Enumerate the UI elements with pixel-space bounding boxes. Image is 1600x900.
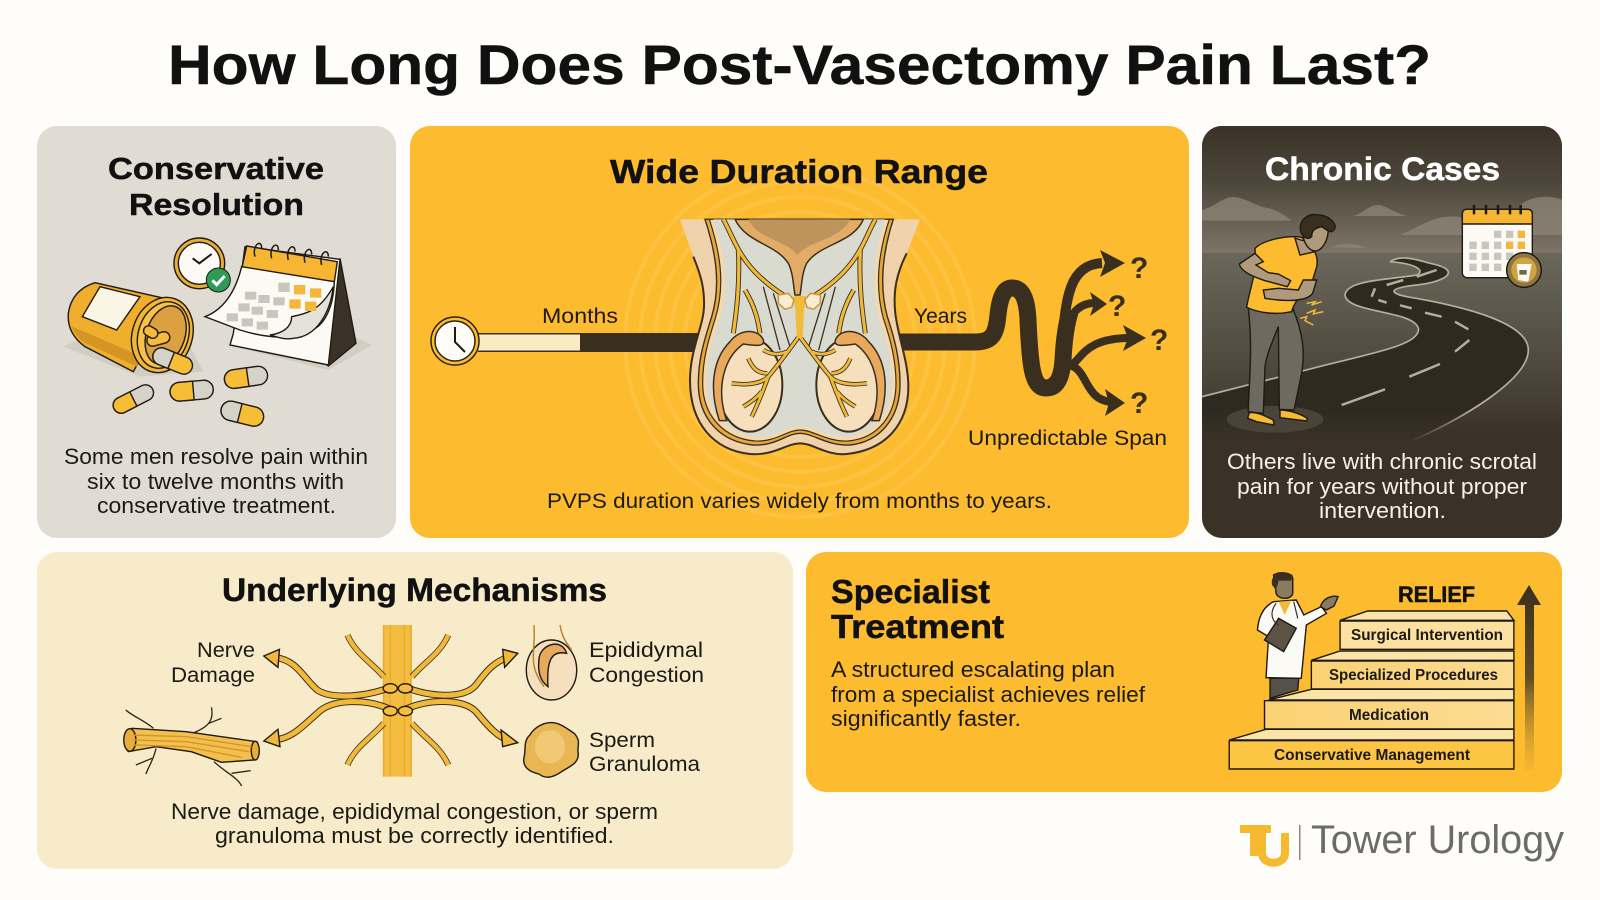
text: mechanisms body: granuloma must be correctly identified. xyxy=(215,823,614,848)
illustration: scrotal anatomy cross-section xyxy=(680,219,920,454)
anatomy: left testis and nerves xyxy=(713,219,800,432)
label: months: Months xyxy=(542,305,618,328)
timeline: years path splitting into unknown outcomes: ? xyxy=(1108,290,1126,323)
text: specialist body: from a specialist achieves relief xyxy=(831,682,1146,707)
panel: specialist treatment xyxy=(806,552,1562,792)
labels: mechanism names: Epididymal xyxy=(589,639,703,662)
icon: damaged nerve fibre xyxy=(124,707,259,786)
timeline: months bar with clock xyxy=(431,305,708,365)
icon: man holding side xyxy=(1239,215,1335,425)
text: specialist body xyxy=(831,657,1146,731)
timeline: years path splitting into unknown outcomes: ? xyxy=(1150,324,1168,357)
icon: capsules xyxy=(110,345,269,428)
heading: specialist treatment: Treatment xyxy=(831,608,1004,645)
label: years: Years xyxy=(914,305,967,328)
staircase of treatment steps xyxy=(1229,611,1514,769)
illustration: pill bottle, clock and calendar xyxy=(63,238,372,428)
labels: mechanism names: Granuloma xyxy=(589,753,700,776)
icon: epididymis xyxy=(526,625,577,700)
text: conservative body: conservative treatment. xyxy=(97,493,336,518)
heading: conservative resolution: Resolution xyxy=(129,187,304,222)
logo wordmark: Tower Urology xyxy=(1311,818,1564,862)
labels: mechanism names: Damage xyxy=(171,664,255,687)
text: specialist body: significantly faster. xyxy=(831,706,1021,731)
heading: wide duration range: Wide Duration Range xyxy=(610,153,988,190)
panel: underlying mechanisms xyxy=(37,552,793,869)
timeline: years path splitting into unknown outcomes: ? xyxy=(1130,387,1148,420)
text: mechanisms body xyxy=(171,799,658,848)
text: duration body: PVPS duration varies widely from months to years. xyxy=(547,490,1052,513)
icon: clock with green check xyxy=(174,238,230,292)
label: relief: RELIEF xyxy=(1398,582,1475,607)
icon: spilled pill bottle xyxy=(68,283,203,381)
icon: calendar with pain badge xyxy=(1462,205,1541,287)
heading: underlying mechanisms: Underlying Mechanisms xyxy=(222,572,607,608)
timeline: years path splitting into unknown outcomes: ? xyxy=(1130,252,1148,285)
text: chronic body: pain for years without proper xyxy=(1237,474,1527,499)
arrow: rising relief xyxy=(1517,585,1541,770)
text: conservative body: Some men resolve pain within xyxy=(64,444,368,469)
labels: mechanism names: Nerve xyxy=(197,639,255,662)
panel: conservative resolution xyxy=(37,126,396,538)
heading: specialist treatment xyxy=(831,573,1004,645)
timeline: years path splitting into unknown outcomes xyxy=(895,250,1168,450)
text: mechanisms body: Nerve damage, epididymal congestion, or sperm xyxy=(171,799,658,824)
diagram: central nerve with arrows xyxy=(264,625,518,777)
staircase of treatment steps: Surgical Intervention xyxy=(1351,627,1503,644)
heading: conservative resolution: Conservative xyxy=(108,151,324,186)
staircase of treatment steps: Medication xyxy=(1349,707,1429,724)
title: How Long Does Post-Vasectomy Pain Last? xyxy=(168,33,1431,96)
staircase of treatment steps: Specialized Procedures xyxy=(1329,667,1498,684)
labels: mechanism names: Sperm xyxy=(589,729,655,752)
labels: mechanism names: Congestion xyxy=(589,664,704,687)
logo: Tower Urology xyxy=(1240,818,1564,863)
icon: doctor presenting xyxy=(1257,573,1338,698)
staircase of treatment steps: Conservative Management xyxy=(1274,747,1470,764)
heading: conservative resolution xyxy=(108,151,324,222)
logo mark xyxy=(1240,825,1285,863)
text: chronic body xyxy=(1227,449,1537,523)
panel: wide duration range xyxy=(410,126,1189,538)
icon: desk calendar xyxy=(205,243,356,366)
anatomy: right testis and nerves xyxy=(799,219,885,432)
text: specialist body: A structured escalating plan xyxy=(831,657,1115,682)
text: chronic body: intervention. xyxy=(1319,498,1446,523)
text: chronic body: Others live with chronic scrotal xyxy=(1227,449,1537,474)
icon: clock xyxy=(431,317,479,365)
labels: mechanism names xyxy=(171,639,704,776)
panel: chronic cases xyxy=(1202,125,1563,538)
heading: specialist treatment: Specialist xyxy=(831,573,990,610)
icon: sperm granuloma xyxy=(524,723,578,777)
text: conservative body xyxy=(64,444,368,518)
text: conservative body: six to twelve months with xyxy=(87,469,344,494)
road xyxy=(1202,258,1563,442)
heading: chronic cases: Chronic Cases xyxy=(1265,151,1500,187)
label: unpredictable span: Unpredictable Span xyxy=(968,427,1167,450)
illustration: man in pain on winding road xyxy=(1202,125,1563,442)
